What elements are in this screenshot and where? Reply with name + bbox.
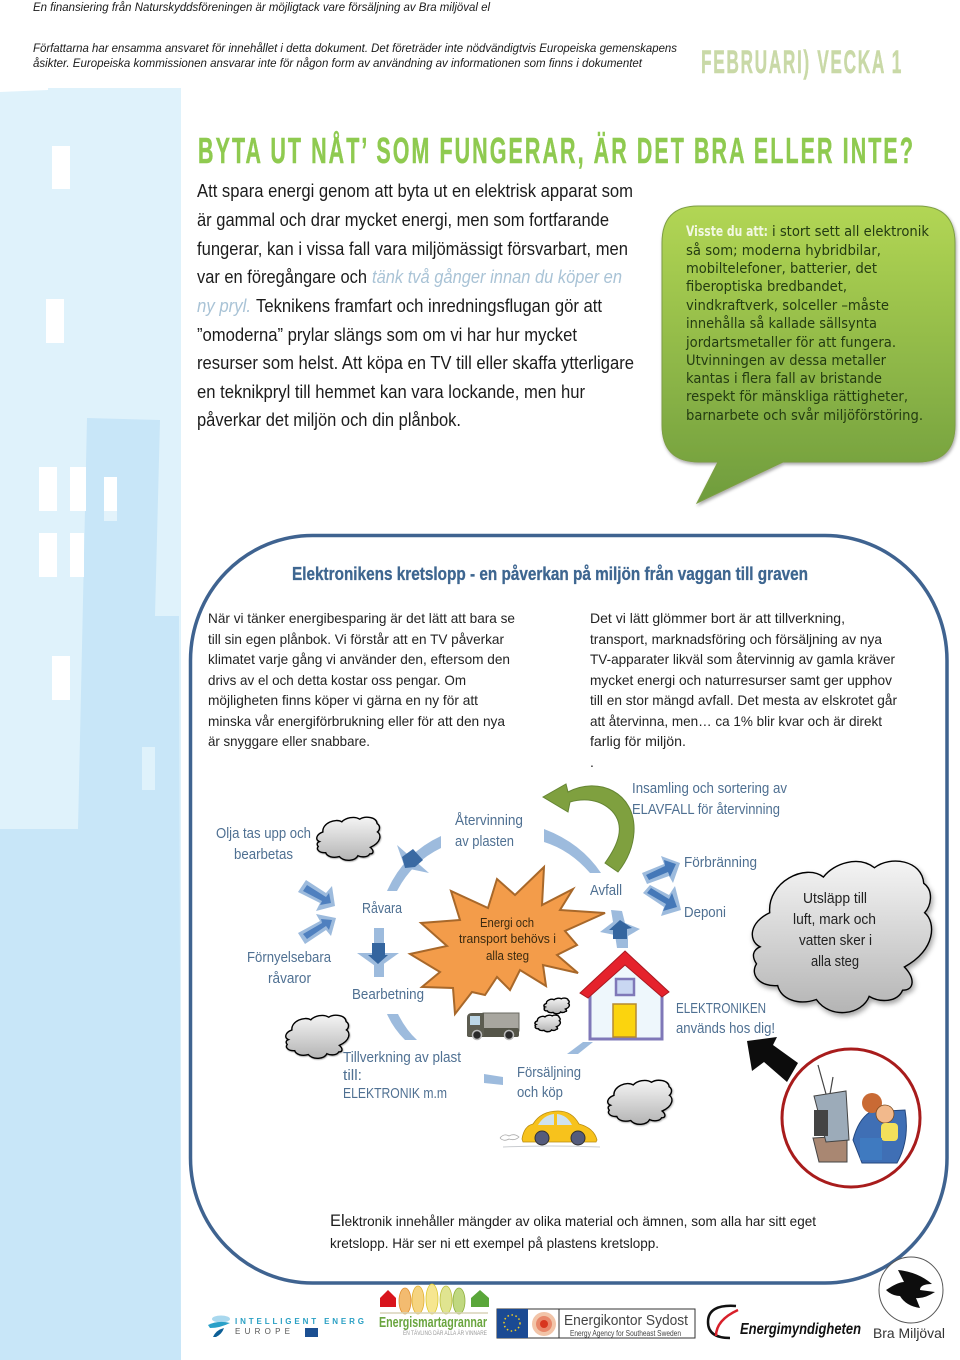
right column text: TV-apparater likväl som återvinnig av gamla kräver: [590, 651, 895, 667]
panel heading: Elektronikens kretslopp - en påverkan på miljön från vaggan till graven: [292, 564, 808, 584]
diagram labels: av plasten: [455, 834, 514, 850]
intro text: [197, 181, 634, 430]
callout: did you know speech bubble: vindkraftverk, solceller –måste: [686, 297, 889, 314]
right column text: .: [590, 754, 594, 770]
diagram labels: ELEKTRONIK m.m: [343, 1086, 447, 1102]
diagram labels: Deponi: [684, 905, 726, 921]
callout: did you know speech bubble: Visste du att:: [686, 224, 768, 240]
right column text: transport, marknadsföring och försäljning av nya: [590, 631, 882, 647]
left column text: klimatet varje gång vi använder den, eftersom den: [208, 651, 510, 667]
closing text: kretslopp. Här ser ni ett exempel på plastens kretslopp.: [330, 1235, 659, 1251]
arrow: oil into raw material: [298, 880, 335, 911]
callout: emissions cloud: luft, mark och: [793, 912, 876, 928]
callout: did you know speech bubble: fiberoptiska bredbandet,: [686, 279, 847, 295]
callout: emissions cloud: [752, 861, 932, 1013]
panel: lifecycle frame: [190, 536, 947, 1283]
intro text: Att spara energi genom att byta ut en elektrisk apparat som: [197, 181, 633, 201]
logo: Energikontor Sydost: Energikontor Sydost: [564, 1312, 689, 1329]
logo: Bra Miljöval: Bra Miljöval: [873, 1325, 945, 1341]
arrow: black arrow to usage label: [747, 1037, 798, 1082]
right column text: mycket energi och naturresurser samt ger upphov: [590, 672, 892, 688]
diagram labels: Bearbetning: [352, 987, 424, 1003]
closing text: Elektronik innehåller mängder av olika material och ämnen, som alla har sitt eget: [330, 1211, 816, 1230]
funding note: Författarna har ensamma ansvaret för innehållet i detta dokument. Det företräder inte nödvändigtvis Europeiska gemenskapens: [33, 43, 677, 55]
icon: people watching tv in red circle: [782, 1049, 920, 1187]
intro text: ny pryl.: [197, 296, 251, 316]
icon: truck: [467, 1013, 519, 1040]
logo: Energikontor Sydost: [497, 1309, 695, 1338]
diagram labels: Förbränning: [684, 855, 757, 871]
left column text: drivs av el och detta kostar oss pengar. Om: [208, 672, 466, 688]
logo: Energismartagrannar: EN TÄVLING DÄR ALLA ÄR VINNARE: [403, 1330, 487, 1337]
left column text: till sin egen plånbok. Vi förstår att en TV påverkar: [208, 631, 504, 647]
funding note: En finansiering från Naturskyddsföreningen är möjligtack vare försäljning av Bra miljöval el: [33, 2, 490, 14]
icon: orange energy burst: alla steg: [486, 949, 529, 963]
right column text: [590, 610, 897, 770]
logo: Energimyndigheten: [708, 1306, 861, 1338]
intro text: är gammal och drar mycket energi, men som fortfarande: [197, 210, 609, 230]
closing text: [330, 1211, 816, 1251]
callout: did you know speech bubble: i stort sett all elektronik: [772, 224, 930, 240]
right column text: till en stor mängd avfall. Det mesta av elskrotet går: [590, 692, 897, 708]
diagram labels: Olja tas upp och: [216, 826, 311, 842]
icon: orange energy burst: transport behövs i: [459, 932, 556, 946]
callout: did you know speech bubble: innehålla så kallade sällsynta: [686, 315, 877, 332]
diagram labels: Försäljning: [517, 1065, 581, 1081]
icon: sales cloud: [608, 1080, 672, 1124]
diagram labels: Avfall: [590, 883, 622, 899]
left column text: minska vår energiförbrukning eller för att den nya: [208, 713, 505, 729]
diagram labels: bearbetas: [234, 847, 293, 863]
icon: orange energy burst: Energi och: [480, 916, 534, 930]
logo: Intelligent Energy Europe: INTELLIGENT ENERG: [235, 1317, 367, 1326]
diagram labels: ELAVFALL för återvinning: [632, 802, 780, 818]
logo: Intelligent Energy Europe: [208, 1316, 367, 1337]
logo: Energikontor Sydost: Energy Agency for Southeast Sweden: [570, 1329, 681, 1338]
right column text: Det vi lätt glömmer bort är att tillverkning,: [590, 610, 845, 626]
callout: did you know speech bubble: jordartsmetaller för att fungera.: [685, 335, 896, 351]
logo: Energimyndigheten: Energimyndigheten: [740, 1321, 861, 1338]
intro text: tänk två gånger innan du köper en: [372, 267, 622, 287]
callout: did you know speech bubble: respekt för mänskliga rättigheter,: [686, 389, 908, 405]
arrow: recycled material into raw material: [397, 845, 429, 873]
callout: did you know speech bubble: så som; moderna hybridbilar,: [686, 242, 881, 259]
arrow: green recycling curve: [543, 784, 634, 872]
diagram labels: [216, 781, 788, 1102]
left column text: [208, 610, 515, 749]
funding note: åsikter. Europeiska kommissionen ansvarar inte för någon form av användning av informationen som finns i dokumentet: [33, 58, 643, 70]
funding note: [33, 2, 677, 70]
diagram labels: ELEKTRONIKEN: [676, 1001, 766, 1017]
icon: manufacturing cloud: [286, 1015, 349, 1058]
intro text: Teknikens framfart och inredningsflugan gör att: [256, 296, 602, 316]
callout: did you know speech bubble: Utvinningen av dessa metaller: [686, 353, 886, 369]
intro text: påverkar det miljön och din plånbok.: [197, 410, 461, 430]
arrow: waste to incineration: [642, 856, 680, 884]
icon: truck exhaust cloud lower: [535, 1015, 560, 1032]
arrow: raw material down to processing: [357, 928, 399, 977]
right column text: att återvinna, men… ca 1% blir kvar och är direkt: [590, 713, 882, 729]
left column text: När vi tänker energibesparing är det lätt att bara se: [208, 610, 515, 626]
icon: yellow car: [500, 1111, 600, 1147]
arrow: waste to landfill: [643, 885, 681, 916]
logo: Energismartagrannar: Energismartagrannar: [379, 1314, 487, 1331]
left column text: möjligheten finns köper vi gärna en ny för att: [208, 692, 478, 708]
callout: did you know speech bubble: kantas i flera fall av bristande: [686, 371, 882, 387]
icon: oil cloud: [317, 817, 380, 860]
callout: emissions cloud: vatten sker i: [799, 933, 872, 949]
diagram labels: råvaror: [268, 971, 311, 987]
logo: Energismartagrannar: [379, 1284, 489, 1337]
callout: did you know speech bubble: [662, 206, 955, 503]
callout: did you know speech bubble: barnarbete och svår miljöförstöring.: [686, 407, 923, 424]
arrow: renewable materials into raw material: [298, 914, 336, 944]
diagram labels: till:: [343, 1068, 362, 1084]
intro text: ”omoderna” prylar slängs som om vi har hur mycket: [197, 325, 577, 345]
callout: did you know speech bubble: mobiltelefoner, batterier, det: [686, 261, 877, 277]
logo: Intelligent Energy Europe: EUROPE: [235, 1327, 295, 1336]
callout: emissions cloud: Utsläpp till: [803, 891, 867, 907]
intro text: en teknikpryl till hemmet kan vara lockande, men hur: [197, 382, 585, 402]
icon: truck exhaust cloud upper: [544, 998, 569, 1014]
diagram labels: Återvinning: [455, 812, 523, 829]
intro text: fungerar, kan i vissa fall vara miljömässigt försvarbart, men: [197, 239, 628, 259]
diagram labels: Tillverkning av plast: [343, 1050, 461, 1066]
arrow: home to waste: [600, 910, 640, 948]
left column text: är snyggare eller snabbare.: [208, 733, 370, 749]
intro text: resurser som helst. Att köpa en TV till eller skaffa ytterligare: [197, 353, 634, 373]
cycle ring segments: [387, 829, 601, 1085]
icon: orange energy burst: [410, 867, 605, 1014]
callout: emissions cloud: alla steg: [811, 954, 859, 970]
diagram labels: Förnyelsebara: [247, 950, 332, 966]
diagram labels: Insamling och sortering av: [632, 781, 788, 797]
logo: Bra Miljöval: [873, 1257, 945, 1341]
intro text: var en föregångare och: [197, 267, 367, 287]
diagram labels: och köp: [517, 1085, 563, 1101]
diagram labels: används hos dig!: [676, 1021, 775, 1037]
diagram labels: Råvara: [362, 901, 403, 917]
right column text: farlig för miljön.: [590, 733, 686, 749]
icon: house: [580, 951, 669, 1039]
background: city buildings: [0, 88, 181, 1360]
